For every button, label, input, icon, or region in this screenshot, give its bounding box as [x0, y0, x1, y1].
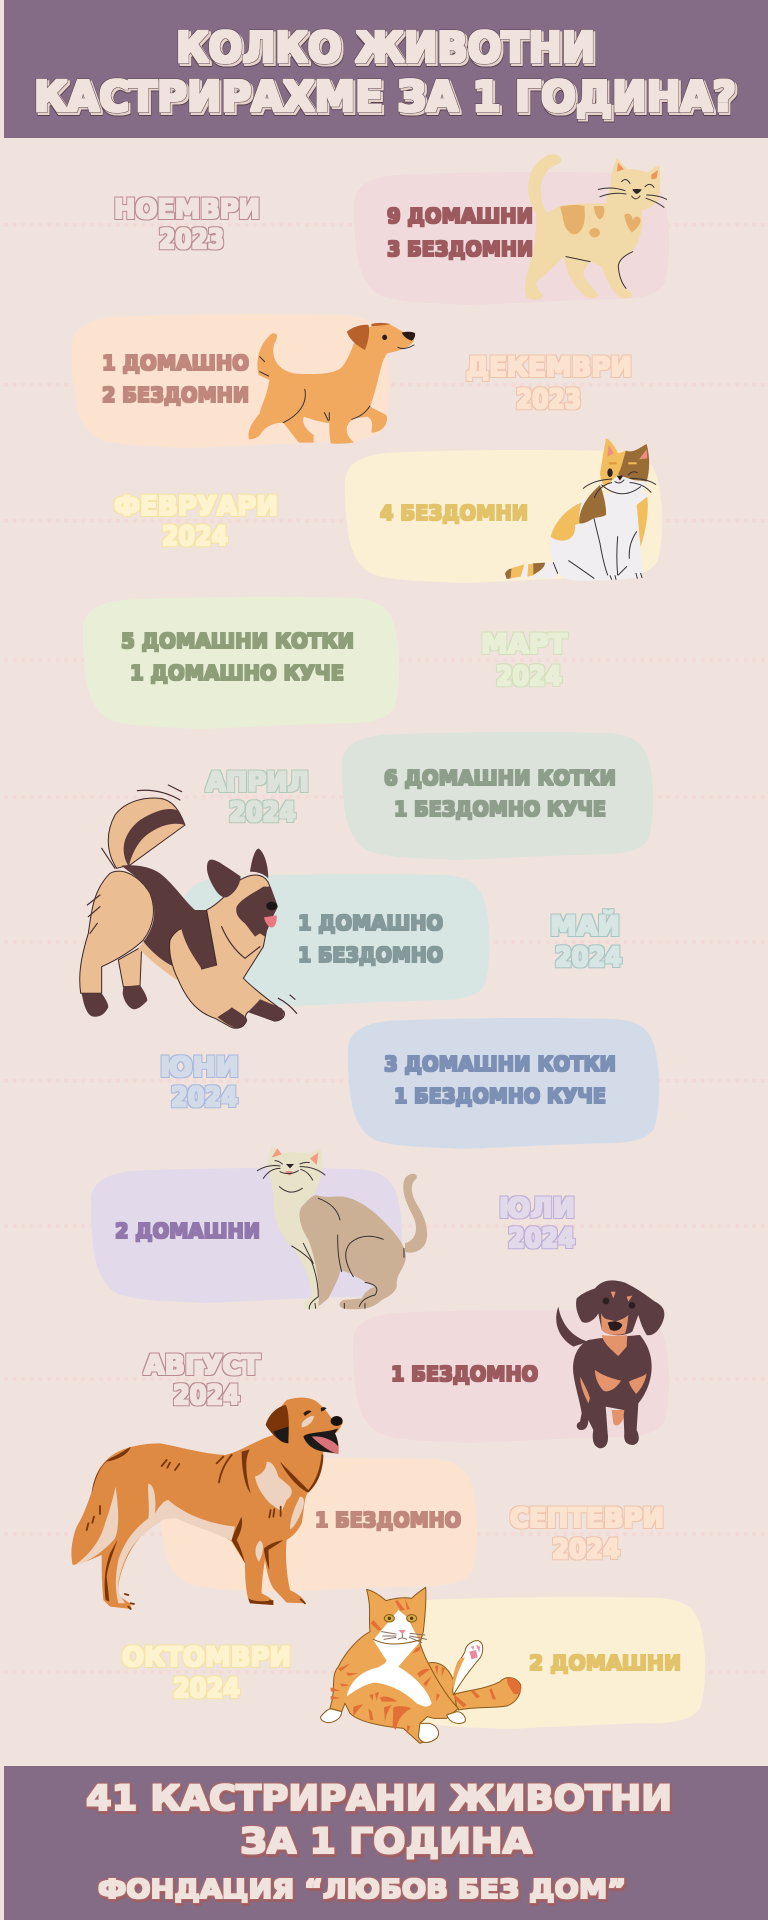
counts: 2 ДОМАШНИ — [529, 1651, 681, 1675]
month label — [550, 910, 622, 973]
panel: march 2024 — [83, 597, 568, 729]
counts: 1 БЕЗДОМНО КУЧЕ — [394, 1084, 606, 1108]
month label: АВГУСТ — [144, 1350, 261, 1381]
footer panel — [4, 1766, 768, 1920]
month label: СЕПТЕВРИ — [510, 1503, 664, 1534]
icon: ginger cat — [321, 1587, 521, 1743]
month label: НОЕМВРИ — [114, 194, 260, 225]
month label: ОКТОМВРИ — [122, 1642, 291, 1673]
panel: may 2024 — [80, 785, 622, 1028]
counts — [121, 629, 354, 685]
counts: 6 ДОМАШНИ КОТКИ — [384, 766, 616, 790]
counts: 2 ДОМАШНИ — [115, 1219, 260, 1243]
counts — [384, 766, 616, 821]
footer headline: ЗА 1 ГОДИНА — [240, 1822, 532, 1862]
counts — [298, 911, 443, 967]
month label: 2024 — [496, 661, 562, 692]
month label: 2023 — [159, 224, 224, 255]
counts: 1 БЕЗДОМНО КУЧЕ — [394, 797, 606, 821]
panel: december 2023 — [72, 314, 632, 448]
counts: 1 ДОМАШНО КУЧЕ — [130, 661, 344, 685]
month label — [160, 1052, 239, 1113]
counts: 3 ДОМАШНИ КОТКИ — [384, 1052, 616, 1076]
counts: 3 БЕЗДОМНИ — [387, 237, 533, 261]
counts — [387, 204, 533, 261]
counts: 4 БЕЗДОМНИ — [380, 501, 528, 525]
panel: october 2024 — [122, 1587, 705, 1743]
month label — [466, 352, 632, 415]
counts: 1 БЕЗДОМНО — [298, 943, 443, 967]
counts — [384, 1052, 616, 1108]
counts: 1 ДОМАШНО — [102, 351, 249, 375]
icon: orange dog — [249, 323, 415, 444]
counts: 2 БЕЗДОМНИ — [102, 383, 249, 407]
panel: july 2024 — [91, 1146, 575, 1309]
counts: 5 ДОМАШНИ КОТКИ — [121, 629, 354, 653]
month label: 2024 — [173, 1673, 240, 1704]
panel: august 2024 — [144, 1280, 669, 1448]
month label — [206, 767, 309, 828]
counts — [102, 351, 249, 407]
icon: calico cat — [505, 438, 656, 581]
icon: dachshund — [556, 1280, 664, 1448]
month label: МАРТ — [481, 629, 568, 660]
month label: ДЕКЕМВРИ — [466, 352, 632, 383]
month label: 2024 — [171, 1082, 238, 1113]
month label: 2024 — [162, 521, 228, 552]
month label — [122, 1642, 291, 1704]
month label: ФЕВРУАРИ — [114, 491, 278, 522]
counts: 1 БЕЗДОМНО — [391, 1362, 538, 1386]
month label: ЮЛИ — [499, 1193, 575, 1224]
icon: siamese cat — [257, 1146, 427, 1309]
panel: september 2024 — [71, 1398, 664, 1609]
month label: 2024 — [552, 1534, 620, 1565]
month label: МАЙ — [550, 910, 620, 942]
panel: june 2024 — [160, 1018, 659, 1149]
panel: november 2023 — [114, 154, 669, 305]
month label — [481, 629, 568, 692]
month label — [499, 1193, 575, 1254]
footer headline — [86, 1779, 672, 1862]
month label — [114, 491, 278, 552]
icon: shepherd dog — [80, 785, 297, 1028]
foundation name: ФОНДАЦИЯ “ЛЮБОВ БЕЗ ДОМ” — [98, 1875, 626, 1905]
panel: april 2024 — [206, 732, 653, 860]
title: КОЛКО ЖИВОТНИ — [176, 23, 595, 72]
panel: february 2024 — [114, 438, 662, 583]
month label: ЮНИ — [160, 1052, 239, 1083]
counts: 1 БЕЗДОМНО — [315, 1508, 461, 1532]
counts: 9 ДОМАШНИ — [387, 204, 533, 228]
icon: golden dog — [71, 1398, 343, 1609]
month label: 2024 — [173, 1380, 240, 1411]
month label — [114, 194, 260, 255]
month label: 2023 — [516, 384, 581, 415]
icon: cream cat — [525, 154, 667, 300]
month label: 2024 — [508, 1223, 575, 1254]
month label: 2024 — [229, 797, 296, 828]
title — [34, 23, 736, 121]
counts: 1 ДОМАШНО — [298, 911, 443, 935]
title: КАСТРИРАХМЕ ЗА 1 ГОДИНА? — [34, 72, 736, 121]
month label: 2024 — [555, 942, 622, 973]
month label — [144, 1350, 261, 1411]
footer headline: 41 КАСТРИРАНИ ЖИВОТНИ — [86, 1779, 672, 1819]
month label — [510, 1503, 664, 1565]
month label: АПРИЛ — [206, 767, 309, 798]
header panel — [4, 0, 768, 138]
